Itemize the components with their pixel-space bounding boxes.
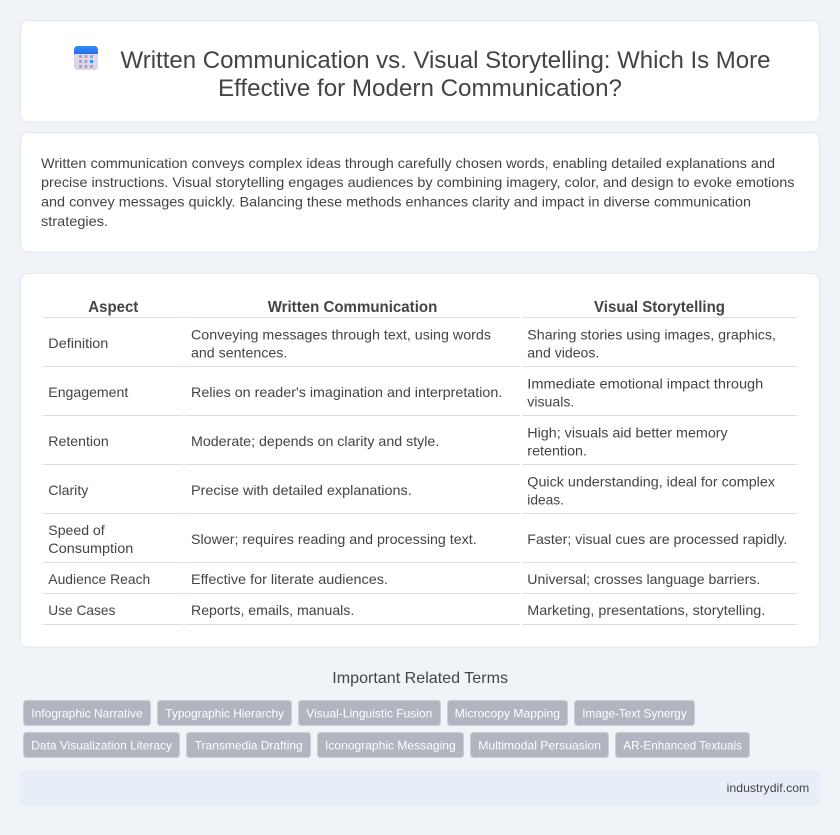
tag: transmedia drafting: Transmedia Drafting	[195, 738, 303, 752]
row: retention: Retention	[48, 433, 109, 449]
tag: infographic narrative	[24, 700, 150, 726]
row: retention: retention.	[527, 442, 587, 458]
tag: infographic narrative: Infographic Narrative	[31, 706, 143, 720]
heading: important related terms: Important Related Terms	[332, 670, 508, 687]
tag: image-text synergy	[574, 700, 694, 726]
row: engagement: visuals.	[527, 393, 574, 409]
footer bar	[20, 771, 820, 805]
row: retention	[48, 424, 728, 458]
table header row: Written Communication	[268, 299, 437, 316]
row: definition: Sharing stories using images, graphics,	[527, 326, 776, 342]
row: use cases	[48, 602, 765, 618]
panel: header card	[20, 20, 820, 122]
row: clarity: Quick understanding, ideal for complex	[527, 473, 775, 489]
row: definition: Conveying messages through text, using words	[191, 326, 491, 342]
table header row: Aspect	[88, 299, 139, 316]
title	[120, 47, 770, 102]
row: retention: Moderate; depends on clarity and style.	[191, 433, 439, 449]
row: clarity: Precise with detailed explanations.	[191, 482, 412, 498]
text block: description paragraph: Written communication conveys complex ideas through carefully chosen words, enabling detailed explanations and	[41, 155, 775, 171]
tag: ar-enhanced textuals: AR-Enhanced Textuals	[623, 738, 742, 752]
icon: calendar	[74, 46, 98, 70]
tag: iconographic messaging	[318, 732, 464, 758]
tag: multimodal persuasion: Multimodal Persuasion	[478, 738, 601, 752]
title: Effective for Modern Communication?	[218, 75, 622, 102]
text block: description paragraph: precise instructions. Visual storytelling engages audiences by combining imagery, color, and design to evoke emotions	[41, 174, 794, 190]
table header row: Visual Storytelling	[594, 299, 725, 316]
row: speed of consumption: Speed of	[48, 522, 105, 538]
row: speed of consumption: Slower; requires reading and processing text.	[191, 531, 477, 547]
tag: multimodal persuasion	[470, 732, 608, 758]
tag: image-text synergy: Image-Text Synergy	[582, 706, 687, 720]
row: use cases: Reports, emails, manuals.	[191, 602, 354, 618]
row: definition: and videos.	[527, 344, 599, 360]
tag: transmedia drafting	[186, 732, 310, 758]
row: speed of consumption	[48, 522, 787, 556]
footer bar: industrydif.com	[727, 781, 809, 795]
tag: microcopy mapping: Microcopy Mapping	[455, 706, 560, 720]
row: definition	[48, 326, 776, 360]
text block: description paragraph: strategies.	[41, 213, 108, 229]
tag: visual-linguistic fusion: Visual-Linguistic Fusion	[306, 706, 432, 720]
tag: visual-linguistic fusion	[298, 700, 440, 726]
row: engagement: Engagement	[48, 384, 128, 400]
row: use cases: Marketing, presentations, storytelling.	[527, 602, 765, 618]
tag: microcopy mapping	[448, 700, 568, 726]
row: clarity	[48, 473, 775, 507]
tag: data visualization literacy: Data Visualization Literacy	[31, 738, 172, 752]
row: use cases: Use Cases	[48, 602, 115, 618]
row: audience reach: Audience Reach	[48, 571, 150, 587]
row: engagement: Relies on reader's imagination and interpretation.	[191, 384, 502, 400]
panel: comparison table	[20, 274, 820, 647]
row: retention: High; visuals aid better memory	[527, 424, 728, 440]
tag: data visualization literacy	[24, 732, 180, 758]
row: speed of consumption: Consumption	[48, 540, 133, 556]
text block: description paragraph	[41, 155, 794, 229]
tag: typographic hierarchy	[158, 700, 292, 726]
row: engagement: Immediate emotional impact through	[527, 375, 763, 391]
title: Written Communication vs. Visual Storytelling: Which Is More	[120, 47, 770, 74]
tag: typographic hierarchy: Typographic Hierarchy	[165, 706, 284, 720]
row: engagement	[48, 375, 763, 409]
tag: ar-enhanced textuals	[616, 732, 750, 758]
table header row	[88, 299, 725, 316]
row: clarity: Clarity	[48, 482, 88, 498]
panel: description	[20, 132, 820, 252]
text block: description paragraph: and convey messages quickly. Balancing these methods enhances clarity and impact in diverse communication	[41, 194, 751, 210]
tags: related terms	[24, 700, 750, 758]
row: speed of consumption: Faster; visual cues are processed rapidly.	[527, 531, 787, 547]
row: definition: and sentences.	[191, 344, 287, 360]
row: audience reach: Universal; crosses language barriers.	[527, 571, 760, 587]
row: audience reach: Effective for literate audiences.	[191, 571, 388, 587]
row: audience reach	[48, 571, 760, 587]
row: clarity: ideas.	[527, 491, 564, 507]
row: definition: Definition	[48, 335, 108, 351]
tag: iconographic messaging: Iconographic Messaging	[325, 738, 456, 752]
